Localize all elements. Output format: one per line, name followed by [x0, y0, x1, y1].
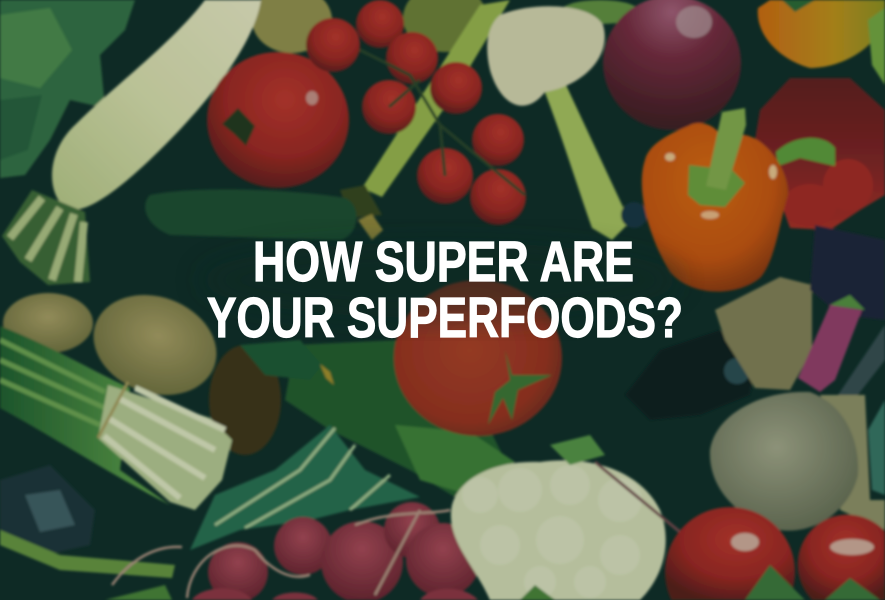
garlic bulb and stalk	[487, 6, 647, 240]
brown squash shadow	[209, 345, 281, 455]
pumpkin	[715, 277, 812, 390]
olive potatoes top	[252, 0, 640, 53]
small cucumber	[240, 340, 334, 385]
spring onions	[0, 326, 232, 510]
big tomato center	[394, 280, 562, 436]
tomatoes bottom right	[665, 507, 885, 600]
purple radish bunch	[798, 295, 885, 405]
eggplant	[625, 330, 755, 420]
title: HOW SUPER ARE	[253, 230, 634, 294]
beet	[710, 392, 858, 531]
long green stem	[0, 530, 175, 578]
red pepper right	[755, 78, 885, 230]
orange pepper	[642, 108, 788, 292]
yellow pepper top right	[758, 0, 885, 85]
tan root right	[820, 395, 885, 530]
daikon radish	[2, 0, 261, 285]
green leaf mid	[285, 340, 515, 500]
potatoes	[3, 278, 231, 412]
title	[207, 230, 683, 350]
red onion	[603, 0, 741, 130]
title: YOUR SUPERFOODS?	[207, 286, 683, 350]
large tomato	[207, 52, 349, 188]
purple cabbage	[0, 465, 95, 555]
cucumber	[145, 189, 383, 240]
purple herbs	[810, 225, 885, 320]
dark shade behind title	[200, 242, 680, 318]
cauliflower	[451, 435, 680, 600]
lettuce top left	[0, 0, 135, 178]
cherry tomatoes	[306, 0, 526, 225]
collard leaf	[190, 425, 420, 550]
green stem	[362, 0, 510, 197]
radishes	[105, 502, 480, 600]
